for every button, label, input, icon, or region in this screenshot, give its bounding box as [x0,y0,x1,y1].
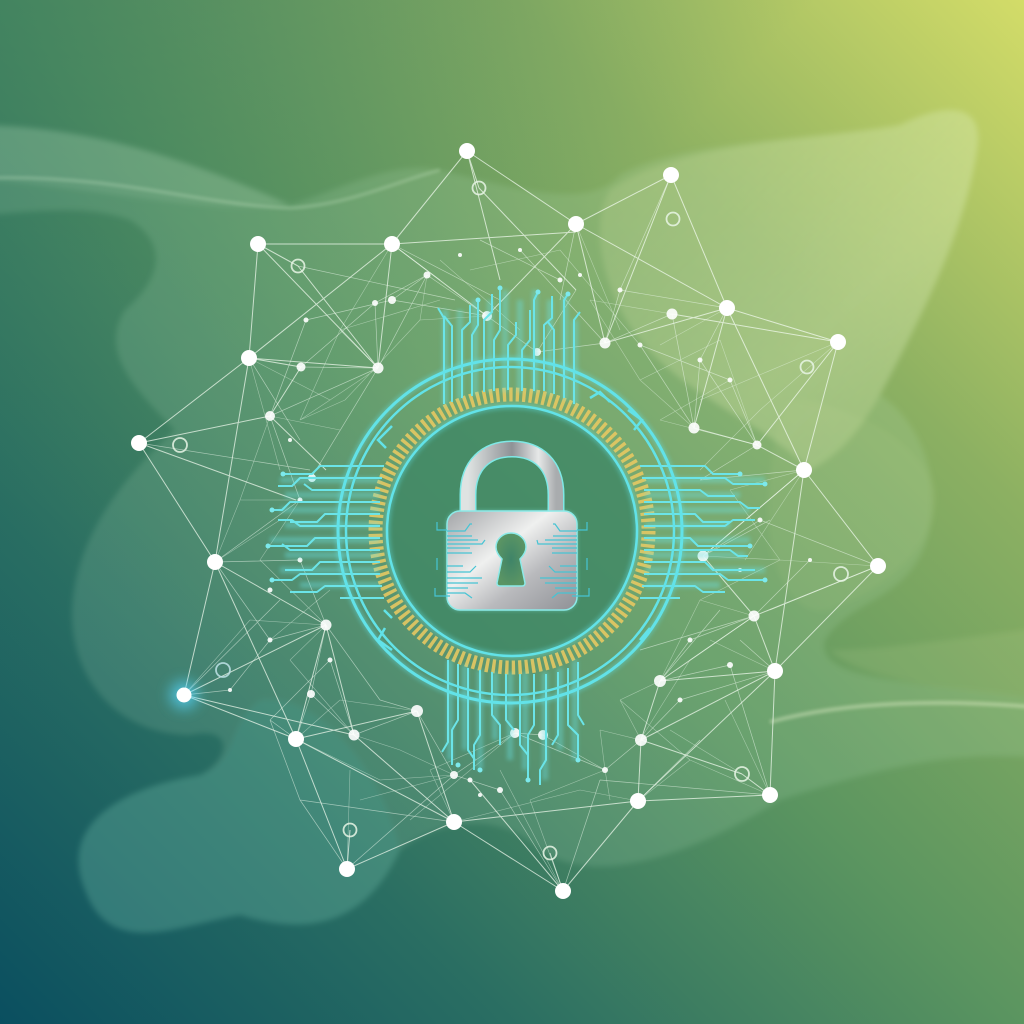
circuit terminals [266,286,768,782]
keyhole [496,533,526,586]
glowing blue node [170,681,198,709]
dark inner disc of the lock ring [387,406,637,656]
circuit: top traces [438,288,580,404]
circuit: left traces [268,466,384,598]
padlock [435,449,589,610]
network edges: dense mesh near the ring [184,224,878,891]
light streaks [0,170,1024,722]
lock circuit: right [537,522,589,598]
lock body [447,511,577,610]
yellow tick ring [376,394,648,668]
network edges: primary links [139,151,878,891]
network edges: fine inner mesh [139,175,878,891]
network nodes: large white dots [131,143,886,899]
lock glow [447,511,577,610]
circuit: glow [270,290,765,780]
cyan concentric rings [338,359,682,703]
shackle [468,449,556,514]
network nodes: small dots [228,248,812,797]
circuit: bottom traces [442,660,584,785]
circuit traces around the ring [268,288,765,785]
circuit: right traces [640,466,765,598]
lock circuit: left [435,522,485,598]
network nodes: hollow rings [173,182,848,860]
